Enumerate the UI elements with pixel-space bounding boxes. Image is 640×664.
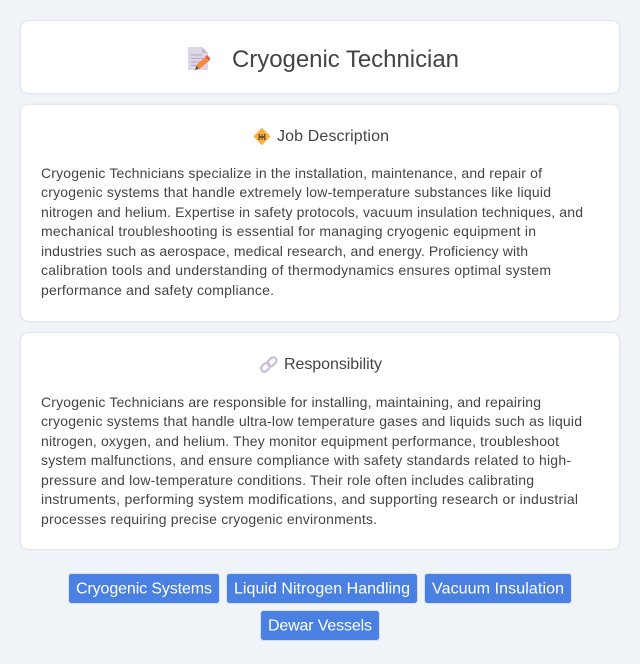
panel: job description: [20, 104, 620, 322]
job description text: performance and safety compliance.: [41, 282, 274, 298]
responsibility text: instruments, performing system modifications, and supporting research or industrial: [41, 491, 578, 507]
job description text: industries such as aerospace, medical research, and energy. Proficiency with: [41, 243, 528, 259]
heading: job description: Job Description: [277, 128, 389, 145]
responsibility text: pressure and low-temperature conditions. Their role often includes calibrating: [41, 472, 534, 488]
responsibility text: processes requiring precise cryogenic environments.: [41, 511, 377, 527]
job description text: calibration tools and understanding of thermodynamics ensures optimal system: [41, 262, 551, 278]
icon: chain link: [260, 356, 278, 373]
tag: liquid nitrogen handling: [226, 574, 418, 604]
icon: orange diamond: [254, 128, 270, 144]
skill tags: [68, 574, 572, 640]
responsibility text: Cryogenic Technicians are responsible for installing, maintaining, and repairing: [41, 394, 541, 410]
job description text: cryogenic systems that handle extremely low-temperature substances like liquid: [41, 184, 551, 200]
panel: title: [20, 20, 620, 94]
tag: dewar vessels: [260, 610, 380, 640]
panel: responsibility: [20, 332, 620, 550]
responsibility text: nitrogen, oxygen, and helium. They monitor equipment performance, troubleshoot: [41, 433, 559, 449]
heading: responsibility: Responsibility: [284, 356, 382, 373]
responsibility text: cryogenic systems that handle ultra-low temperature gases and liquids such as liquid: [41, 413, 582, 429]
job description text: Cryogenic Technicians specialize in the installation, maintenance, and repair of: [41, 165, 542, 181]
responsibility text: [41, 394, 582, 527]
icon: document with pencil: [188, 47, 210, 70]
title text: Cryogenic Technician: [232, 46, 459, 73]
tag: cryogenic systems: Cryogenic Systems: [76, 580, 212, 598]
job description text: mechanical troubleshooting is essential for managing cryogenic equipment in: [41, 223, 536, 239]
tag: vacuum insulation: Vacuum Insulation: [432, 580, 564, 598]
tag: liquid nitrogen handling: Liquid Nitrogen Handling: [234, 580, 410, 598]
tag: vacuum insulation: [424, 574, 572, 604]
tag: dewar vessels: Dewar Vessels: [268, 618, 372, 634]
job description text: nitrogen and helium. Expertise in safety protocols, vacuum insulation techniques, and: [41, 204, 583, 220]
responsibility text: system malfunctions, and ensure compliance with safety standards related to high-: [41, 452, 571, 468]
job description text: [41, 165, 583, 298]
tag: cryogenic systems: [68, 574, 220, 604]
